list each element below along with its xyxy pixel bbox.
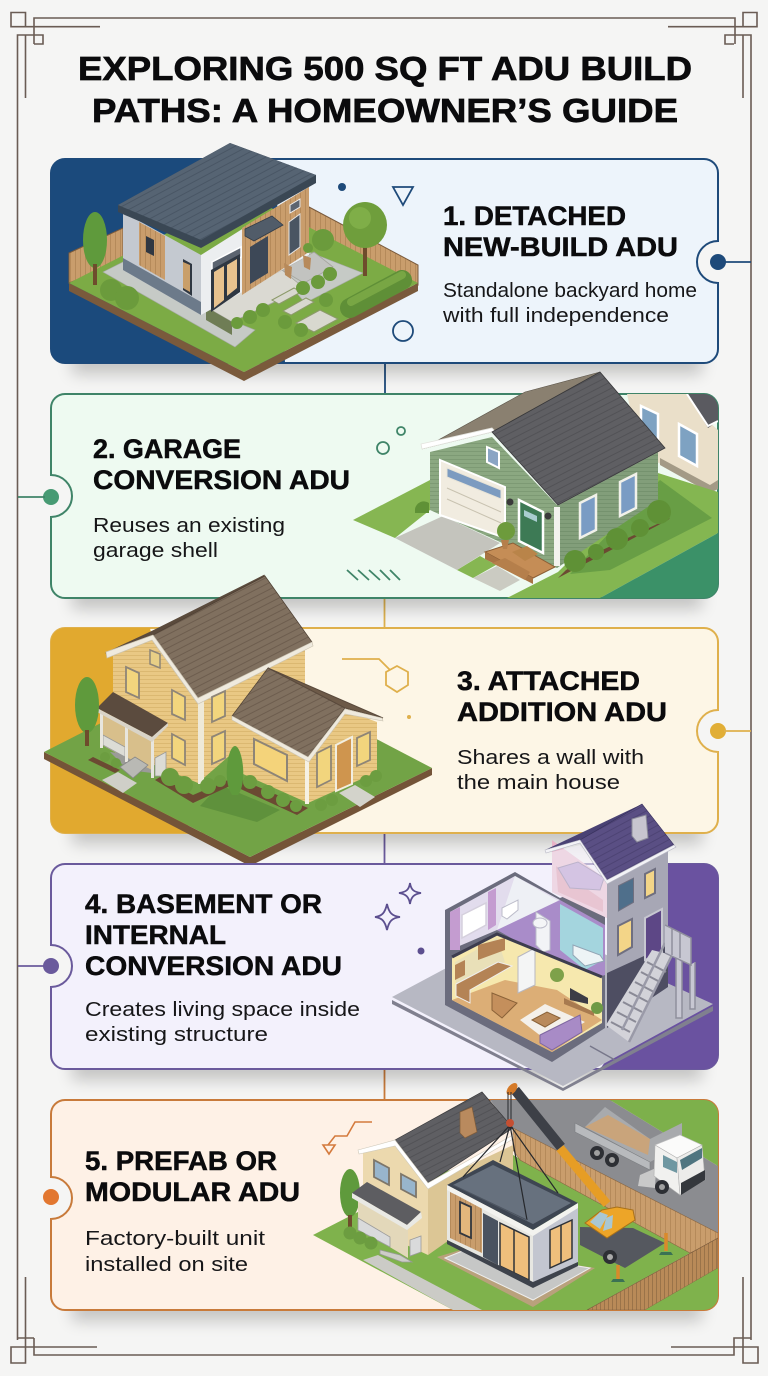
- description: [85, 1227, 265, 1276]
- heading: INTERNAL: [85, 920, 226, 950]
- description: with full independence: [442, 304, 669, 327]
- description: Shares a wall with: [457, 746, 644, 769]
- description: Standalone backyard home: [443, 279, 697, 302]
- card background: [51, 1100, 718, 1310]
- card shadows: [72, 350, 702, 1321]
- decorative shapes: [375, 883, 424, 954]
- title: EXPLORING 500 SQ FT ADU BUILD: [78, 50, 692, 87]
- title: [78, 50, 692, 129]
- card background: [51, 394, 718, 598]
- description: [457, 746, 644, 794]
- heading: ADDITION ADU: [457, 697, 667, 727]
- description: [442, 279, 697, 327]
- decorative shapes: [338, 183, 413, 341]
- heading: [85, 889, 342, 981]
- description: installed on site: [85, 1253, 248, 1276]
- timeline node: [18, 489, 59, 505]
- illustration: detached house: [69, 143, 418, 381]
- decorative shapes: [342, 659, 411, 719]
- heading: [457, 666, 667, 727]
- heading: [93, 434, 350, 495]
- panel: 1 detached new-build ADU: [51, 143, 751, 381]
- heading: NEW-BUILD ADU: [443, 232, 678, 262]
- decorative shapes: [323, 1122, 372, 1154]
- card background: [51, 628, 718, 833]
- heading: [443, 201, 678, 262]
- decorative shapes: [347, 427, 405, 580]
- heading: 3. ATTACHED: [457, 666, 640, 696]
- card background: [51, 159, 718, 363]
- timeline node: [710, 254, 751, 270]
- heading: CONVERSION ADU: [93, 465, 350, 495]
- description: Factory-built unit: [85, 1227, 265, 1250]
- timeline node: [18, 958, 59, 974]
- description: [85, 998, 360, 1046]
- heading: CONVERSION ADU: [85, 951, 342, 981]
- dark corner block: [51, 159, 285, 363]
- heading: MODULAR ADU: [85, 1177, 300, 1207]
- heading: 1. DETACHED: [443, 201, 626, 231]
- panel: 3 attached addition ADU: [44, 576, 751, 866]
- heading: [85, 1146, 300, 1207]
- title: PATHS: A HOMEOWNER’S GUIDE: [92, 92, 678, 129]
- description: [93, 514, 285, 562]
- dark corner block: [600, 864, 718, 1069]
- panel: 2 garage conversion ADU: [18, 372, 718, 598]
- description: Reuses an existing: [93, 514, 285, 537]
- illustration: attached addition: [44, 576, 432, 866]
- heading: 2. GARAGE: [93, 434, 241, 464]
- illustration: prefab crane install: [313, 1081, 718, 1310]
- timeline node: [43, 1189, 59, 1205]
- card background: [51, 864, 718, 1069]
- description: the main house: [457, 771, 620, 794]
- timeline node: [710, 723, 751, 739]
- illustration: garage conversion: [353, 372, 718, 598]
- description: existing structure: [85, 1023, 268, 1046]
- description: Creates living space inside: [85, 998, 360, 1021]
- description: garage shell: [93, 539, 218, 562]
- illustration: basement cutaway: [392, 804, 713, 1091]
- panel: 4 basement or internal conversion ADU: [18, 804, 718, 1091]
- panel: 5 prefab or modular ADU: [43, 1081, 718, 1310]
- connector lines: [384, 363, 386, 1100]
- dark corner block: [51, 628, 190, 833]
- heading: 5. PREFAB OR: [85, 1146, 277, 1176]
- heading: 4. BASEMENT OR: [85, 889, 322, 919]
